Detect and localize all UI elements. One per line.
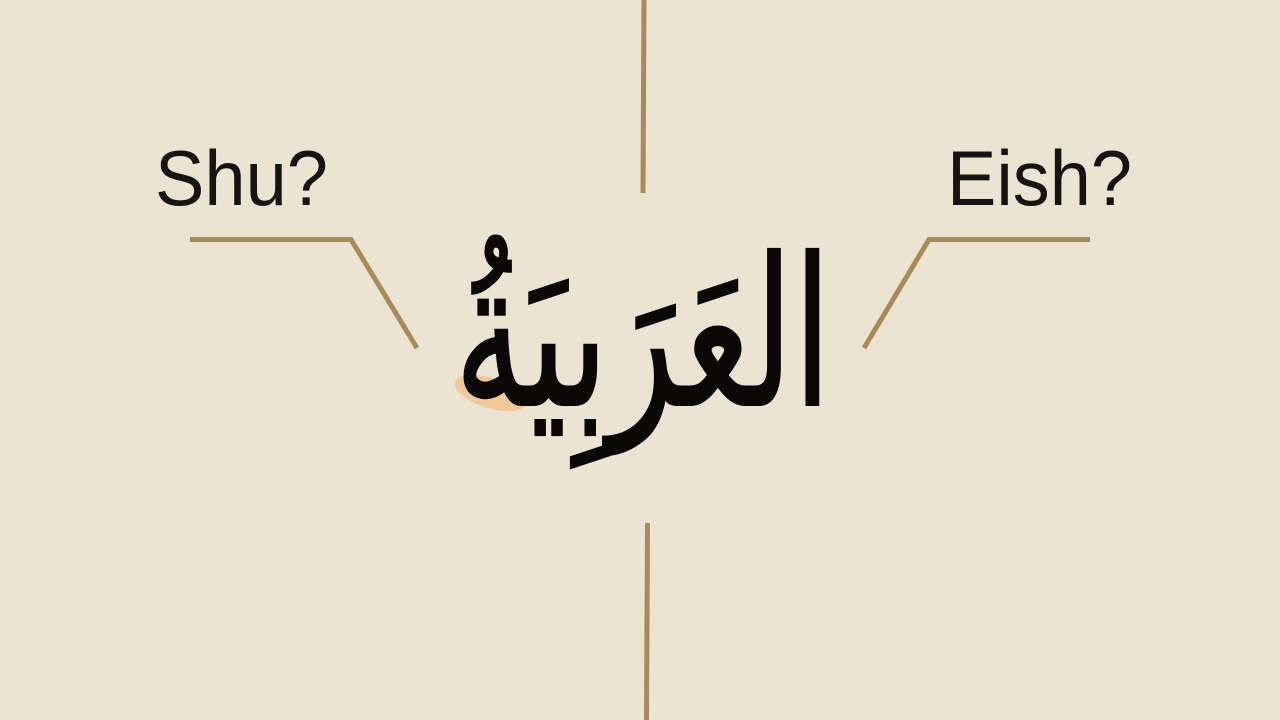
Arabic word: العربية: العَرَبِيَةُ: [455, 215, 831, 469]
left bent connector: [190, 240, 417, 348]
orange highlight behind calligraphy: [450, 367, 530, 419]
right bent connector: [864, 240, 1090, 348]
bottom vertical divider: [646, 523, 648, 720]
label: Shu?: Shu?: [155, 134, 328, 222]
label: Eish?: Eish?: [947, 134, 1132, 222]
top vertical divider: [643, 0, 644, 193]
